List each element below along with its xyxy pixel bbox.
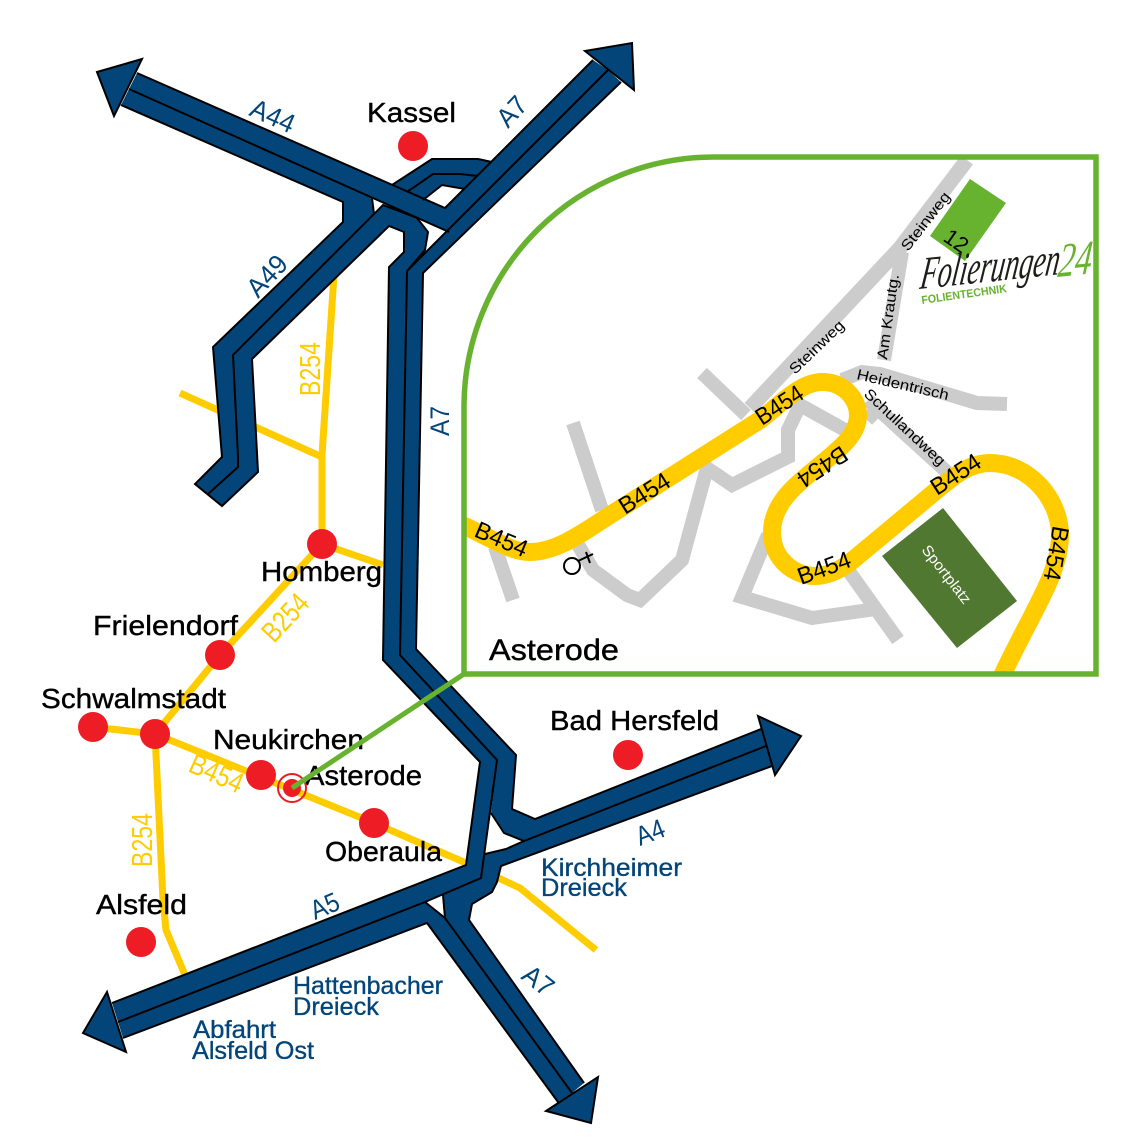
arrow: A7 north	[585, 43, 634, 90]
city labels: Asterode	[305, 760, 422, 791]
sports field	[882, 508, 1017, 648]
road labels: A7	[425, 406, 455, 436]
logo: Folierungen24: 24	[1056, 231, 1095, 288]
road labels: B254	[295, 342, 327, 396]
B454 inset labels	[471, 380, 1074, 591]
street names: Heidentrisch	[855, 366, 951, 404]
city labels: Frielendorf	[93, 610, 238, 641]
interchange labels: Hattenbacher	[293, 972, 443, 1000]
federal roads network	[93, 275, 596, 975]
city labels: Bad Hersfeld	[550, 705, 719, 736]
road B454	[460, 382, 1060, 676]
interchange labels: Alsfeld Ost	[192, 1037, 314, 1065]
road labels: A7	[490, 90, 534, 133]
city labels: Homberg	[261, 556, 382, 587]
city labels: Oberaula	[325, 836, 442, 867]
interchange labels: Abfahrt	[193, 1016, 276, 1044]
B454 inset labels: B454	[1038, 524, 1074, 583]
road labels: B254	[127, 813, 159, 867]
arrow: A4 east	[758, 716, 801, 775]
B454 inset labels: B454	[794, 546, 855, 591]
street names: Am Krautg.	[874, 273, 903, 361]
road labels: A4	[631, 813, 669, 852]
road labels	[127, 90, 669, 1002]
motorway network	[112, 60, 772, 1102]
road labels: A44	[246, 93, 300, 139]
road labels: A5	[306, 887, 344, 926]
B454 inset labels: B454	[792, 440, 852, 493]
icon: location marker	[564, 552, 593, 574]
road labels: A7	[516, 959, 560, 1002]
interchange labels	[192, 854, 682, 1065]
B454 inset labels: B454	[751, 380, 809, 431]
interchange labels: Dreieck	[293, 993, 379, 1021]
inset title: Asterode	[489, 634, 619, 667]
road labels: B254	[256, 587, 316, 649]
local streets	[495, 160, 1007, 640]
street names: Steinweg	[898, 189, 954, 254]
street names: Steinweg	[786, 317, 848, 378]
arrow: A7 south	[546, 1077, 598, 1123]
street names: Schullandweg	[860, 385, 949, 470]
street names: 12	[939, 224, 974, 258]
building number 12	[930, 179, 1006, 261]
city labels	[41, 97, 719, 920]
sports field: Sportplatz	[918, 542, 974, 608]
panel border	[464, 157, 1096, 674]
city labels: Neukirchen	[213, 724, 364, 755]
B454 inset labels: B454	[926, 448, 986, 501]
road labels: B454	[184, 748, 248, 800]
city labels: Schwalmstadt	[41, 683, 226, 714]
B454 inset labels: B454	[471, 517, 532, 563]
B454 inset labels: B454	[614, 468, 676, 520]
city labels: Alsfeld	[96, 889, 187, 920]
city markers	[78, 131, 643, 957]
logo: Folierungen24: FOLIENTECHNIK	[921, 283, 1008, 307]
street names	[786, 189, 974, 470]
Asterode marker with connector to inset	[278, 674, 464, 802]
interchange labels: Dreieck	[541, 874, 627, 902]
road labels: A49	[240, 249, 294, 303]
city labels: Kassel	[367, 97, 456, 128]
arrow: A44 west	[97, 59, 142, 116]
inset panel: Asterode local map	[460, 157, 1096, 676]
interchange labels: Kirchheimer	[541, 854, 682, 882]
arrow: A5 south-west	[83, 992, 126, 1052]
